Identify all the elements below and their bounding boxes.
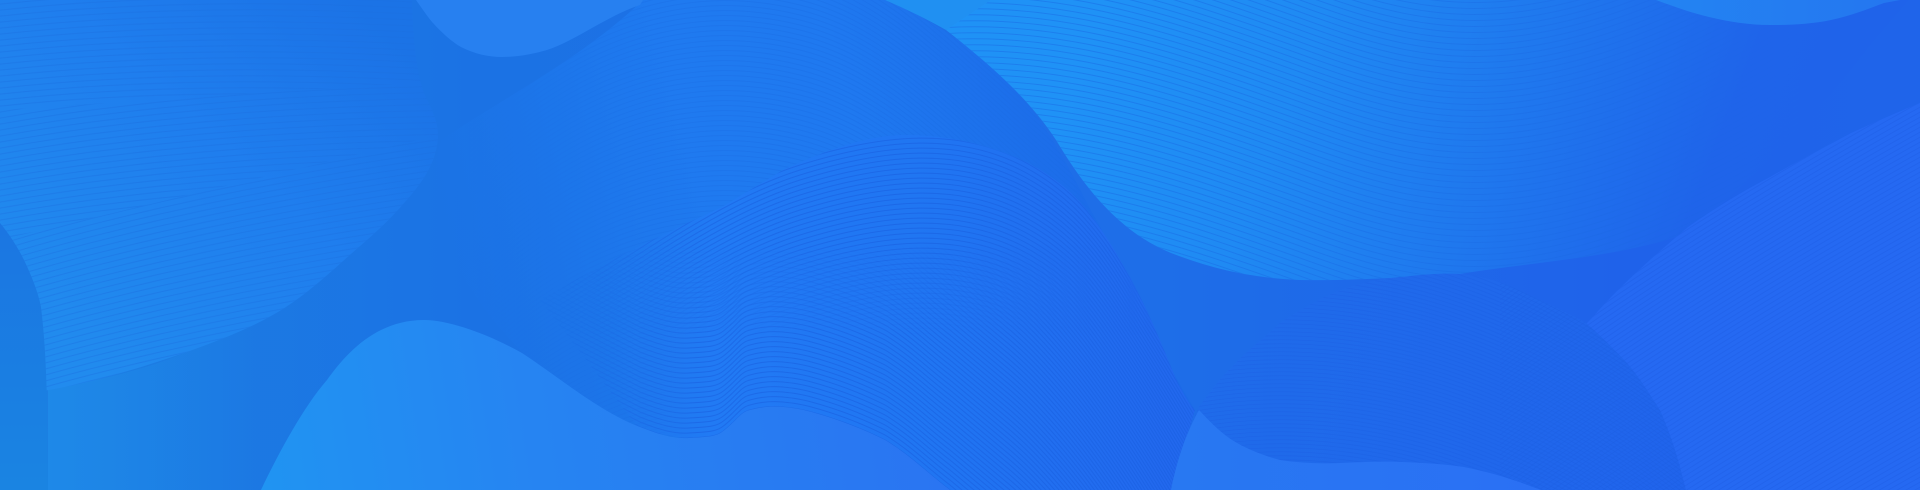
wave: bottom-left light blob xyxy=(261,320,950,490)
wave: upper centre band xyxy=(434,0,1195,490)
wave: top-left lined panel xyxy=(0,0,387,390)
wave: large upper-right lined panel xyxy=(946,0,1909,280)
wave: lower-left faint tint xyxy=(48,307,286,490)
wave: lower-right dark panel xyxy=(1171,274,1686,490)
wave: centre front lined panel xyxy=(620,135,1194,490)
wave: top centre-left blob xyxy=(416,0,643,57)
wave: right lined panel xyxy=(1560,103,1920,490)
wave: top light wedge xyxy=(885,0,1000,43)
wave: top-right blob xyxy=(1656,0,1900,25)
wave: left edge strip xyxy=(0,223,48,490)
wave: bottom-right light blob xyxy=(1171,410,1541,490)
